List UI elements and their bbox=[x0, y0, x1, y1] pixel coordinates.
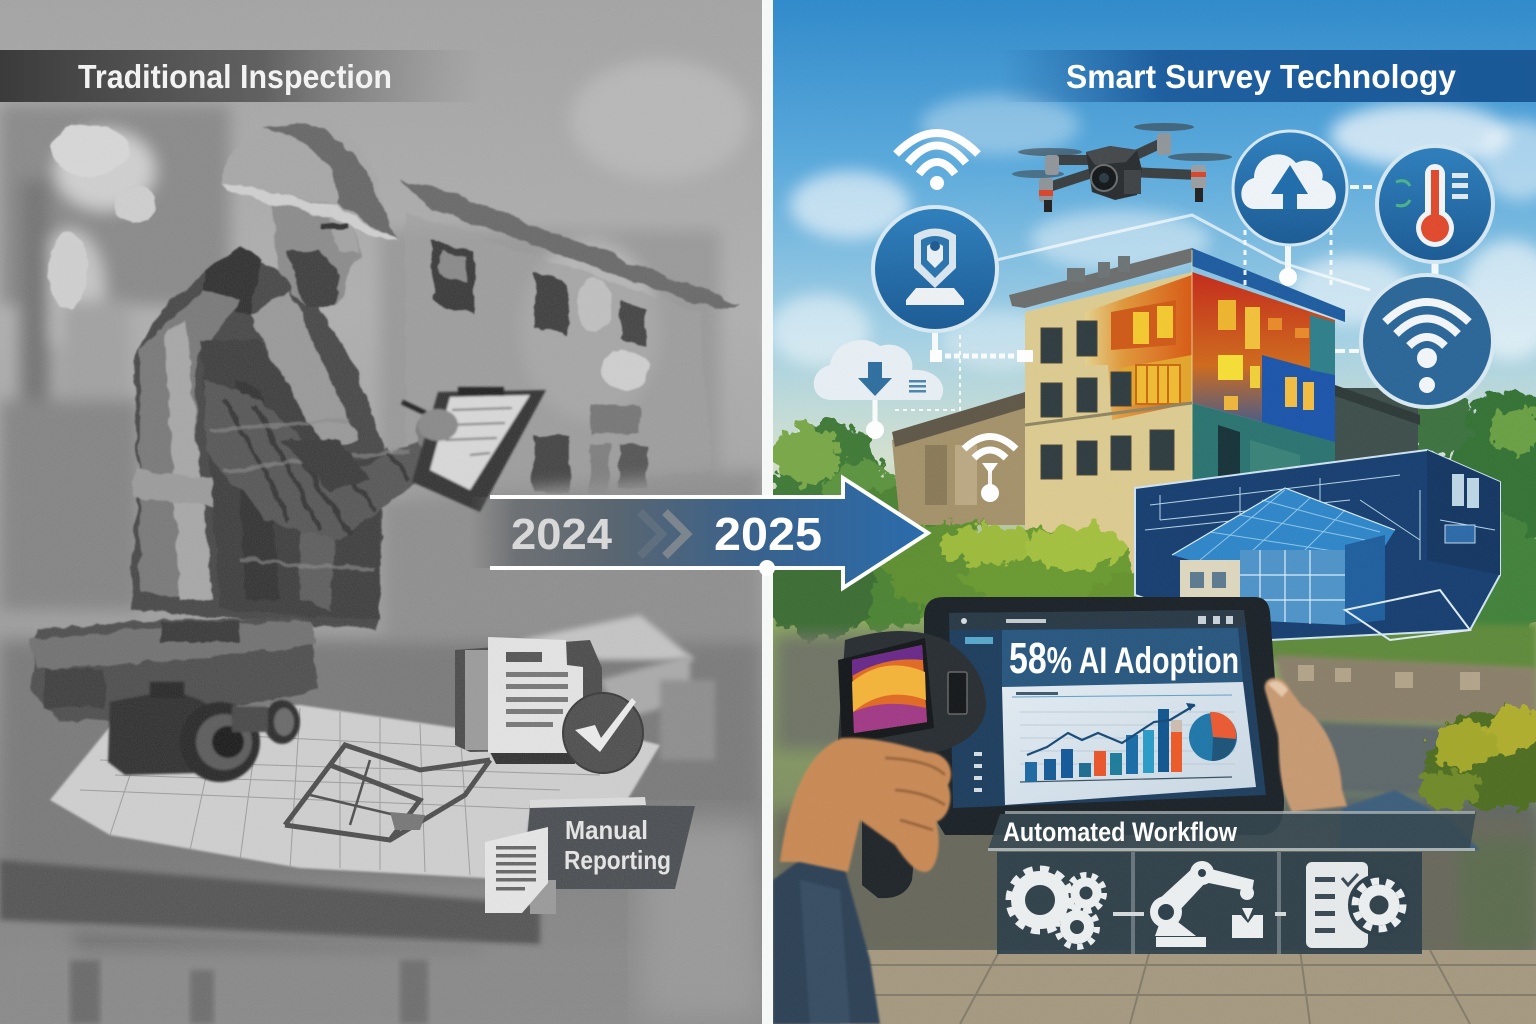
headline panel: 58% AI Adoption bbox=[1009, 634, 1239, 683]
icon: cloud download bbox=[814, 340, 943, 439]
workflow heading band: Automated Workflow bbox=[1003, 817, 1238, 847]
icon: wifi signal top bbox=[896, 133, 978, 190]
toolbox bbox=[30, 618, 318, 722]
clipboard and pen bbox=[402, 387, 546, 512]
icon: report documents with check bbox=[455, 637, 643, 773]
workflow heading band bbox=[988, 811, 1476, 851]
connector lines bbox=[875, 187, 1435, 485]
hard hat bbox=[222, 120, 398, 240]
front facade bbox=[1025, 272, 1192, 600]
icon: drone bbox=[1012, 123, 1232, 212]
icon: cloud upload circle bbox=[1233, 131, 1347, 245]
icon: wifi circle right bbox=[1361, 275, 1493, 407]
year 2025: 2025 bbox=[714, 508, 822, 560]
side building bbox=[892, 385, 1420, 525]
forearm and hand bbox=[205, 380, 432, 540]
torso and jacket bbox=[130, 250, 385, 630]
title: traditional inspection bbox=[0, 50, 480, 102]
panel: traditional inspection bbox=[0, 0, 762, 1024]
tablet with dashboard bbox=[924, 597, 1284, 835]
background: clouds bbox=[770, 95, 1536, 370]
year 2024: 2024 bbox=[511, 510, 613, 559]
title: smart survey technology bbox=[1000, 50, 1536, 102]
arrow: 2024 to 2025 bbox=[470, 478, 928, 588]
icon: gears bbox=[1009, 869, 1104, 947]
roof bbox=[1009, 248, 1192, 308]
chart bbox=[1002, 682, 1256, 805]
divider bbox=[762, 0, 773, 1024]
icon: thermometer circle bbox=[1377, 146, 1493, 262]
callout: manual reporting: Reporting bbox=[564, 845, 671, 875]
background: weathered building bbox=[0, 60, 762, 640]
trees in front of building bbox=[885, 522, 1205, 628]
bush bbox=[1420, 708, 1536, 810]
side thermal facade bbox=[1192, 272, 1335, 442]
blueprint hologram panel bbox=[1135, 450, 1500, 640]
film grain bbox=[773, 0, 1536, 1024]
thermal camera in hand bbox=[838, 631, 986, 898]
callout: manual reporting: Manual bbox=[565, 815, 648, 845]
icon: checklist with gear bbox=[1306, 862, 1403, 948]
sleeve and forearm bbox=[773, 860, 880, 1024]
house wireframe bbox=[1172, 488, 1395, 625]
background: retaining wall and ground bbox=[773, 620, 1536, 1024]
icon: wifi signal small bbox=[964, 436, 1016, 502]
icon: small document bbox=[485, 827, 556, 914]
title: traditional inspection: Traditional Inspection bbox=[78, 58, 392, 95]
film grain bbox=[0, 0, 762, 1024]
head bbox=[272, 190, 362, 308]
panel: workflow icons bbox=[997, 852, 1422, 954]
chevron bbox=[640, 512, 687, 556]
left hand gripping camera bbox=[780, 738, 951, 872]
building with thermal overlay bbox=[1009, 248, 1345, 600]
worker with hard hat and vest bbox=[130, 120, 464, 630]
table surface bbox=[0, 615, 762, 1024]
title: smart survey technology: Smart Survey Technology bbox=[1066, 58, 1457, 95]
callout: manual reporting bbox=[523, 797, 695, 889]
icon: robot arm bbox=[1150, 861, 1263, 947]
right hand holding tablet bbox=[1265, 678, 1480, 850]
blueprint sheet bbox=[50, 705, 660, 880]
camera bbox=[108, 682, 300, 782]
windows bbox=[1041, 321, 1174, 479]
background: trees bbox=[765, 384, 1536, 650]
icon: connector node top bbox=[1279, 268, 1297, 286]
icon: camera security circle bbox=[873, 207, 997, 331]
headline panel bbox=[1002, 628, 1243, 688]
panel: smart survey technology bbox=[765, 0, 1536, 1024]
